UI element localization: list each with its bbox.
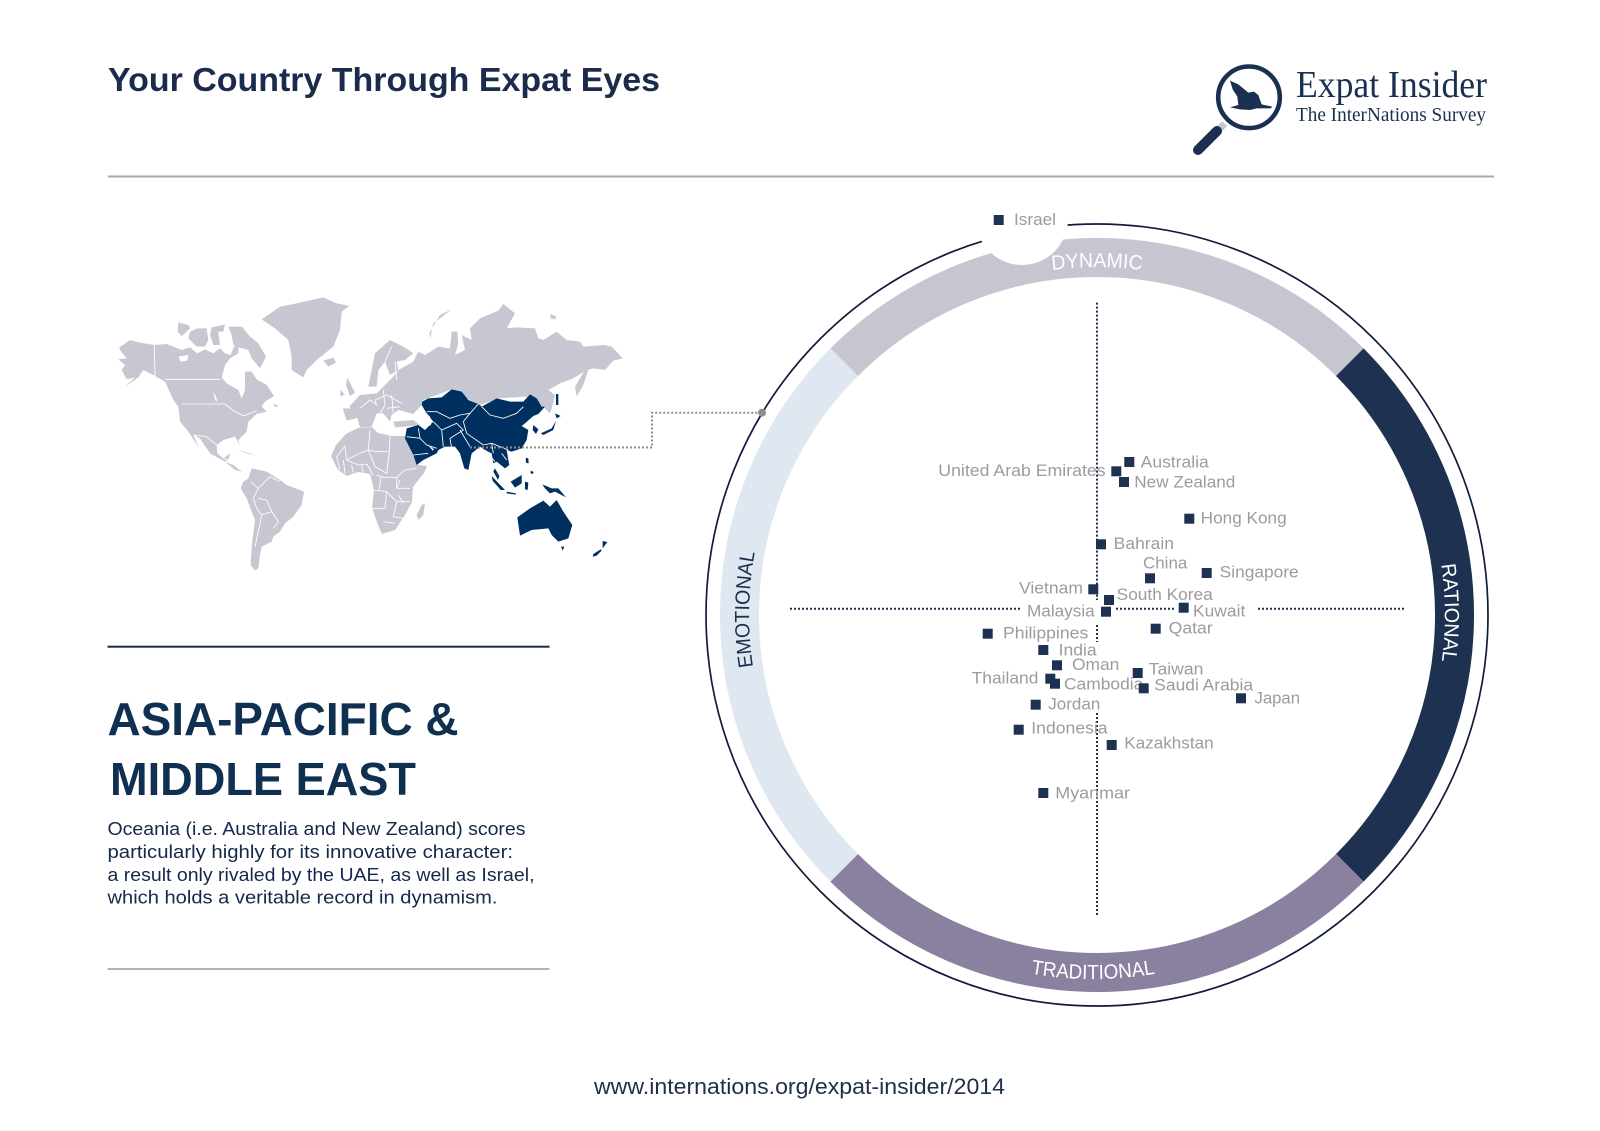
country: Singapore: Singapore	[1220, 563, 1299, 582]
icon: magnifying glass with bird	[1198, 66, 1280, 150]
text block: region description	[106, 818, 535, 908]
country: Qatar	[1151, 619, 1213, 638]
country: Philippines: Philippines	[1003, 623, 1088, 642]
ring segment: rational	[1350, 362, 1455, 868]
logo wordmark: Expat Insider	[1296, 64, 1487, 106]
map: Australasia	[492, 458, 607, 557]
label: DYNAMIC: DYNAMIC	[1052, 253, 1142, 270]
text block: region description: a result only rivaled by the UAE, as well as Israel,	[108, 864, 534, 885]
ring segment: traditional	[844, 868, 1350, 973]
country: Cambodia: Cambodia	[1064, 675, 1144, 694]
text block: region description: particularly highly for its innovative character:	[108, 841, 513, 862]
connector: dotted leader from map to chart	[470, 413, 758, 448]
panel: region divider bottom	[108, 968, 550, 970]
country: Kazakhstan: Kazakhstan	[1124, 734, 1214, 753]
country: Myanmar: Myanmar	[1055, 783, 1130, 802]
country: Kuwait: Kuwait	[1193, 601, 1246, 620]
country: Japan: Japan	[1254, 688, 1300, 707]
label: RATIONAL: RATIONAL	[1441, 564, 1460, 661]
country: United Arab Emirates: United Arab Emirates	[938, 461, 1106, 480]
text block: region description: which holds a veritable record in dynamism.	[106, 886, 498, 908]
footer url: www.internations.org/expat-insider/2014	[593, 1074, 1005, 1099]
country: Hong Kong: Hong Kong	[1201, 508, 1287, 527]
label: TRADITIONAL: TRADITIONAL	[1033, 960, 1155, 979]
map: South America and Africa	[241, 427, 427, 571]
country: Thailand: Thailand	[972, 668, 1038, 687]
map: highlighted Asia-Pacific and Middle East region	[405, 389, 561, 490]
title: Your Country Through Expat Eyes	[108, 61, 660, 98]
logo: Expat Insider	[1198, 64, 1487, 150]
country: Australia: Australia	[1141, 452, 1209, 471]
chart: circular personality plot	[705, 210, 1489, 1007]
country: Oman: Oman	[1072, 655, 1119, 674]
notch behind Israel	[976, 173, 1068, 265]
map: Europe and Russia	[340, 304, 623, 427]
leader end dot	[758, 409, 766, 417]
country: Qatar: Qatar	[1169, 619, 1213, 638]
ring segment: dynamic	[844, 257, 1350, 362]
country: New Zealand: New Zealand	[1134, 472, 1235, 491]
country: India	[1038, 640, 1097, 659]
country: Indonesia: Indonesia	[1031, 719, 1108, 738]
country: India: India	[1059, 640, 1097, 659]
heading: region name: MIDDLE EAST	[110, 753, 416, 805]
country: Taiwan: Taiwan	[1149, 660, 1203, 679]
country: Israel: Israel	[1014, 210, 1056, 229]
axes	[790, 303, 1405, 916]
country: Malaysia: Malaysia	[1027, 601, 1095, 620]
text block: region description: Oceania (i.e. Australia and New Zealand) scores	[108, 818, 526, 839]
country: Jordan: Jordan	[1048, 694, 1100, 713]
country: Bahrain: Bahrain	[1114, 534, 1174, 553]
header rule	[108, 176, 1494, 178]
panel: region divider top	[108, 646, 550, 648]
country: China: China	[1143, 554, 1188, 573]
country: Saudi Arabia: Saudi Arabia	[1154, 675, 1254, 694]
map: Americas north	[118, 297, 349, 472]
outer circle	[706, 224, 1488, 1006]
country: Oman	[1052, 655, 1119, 674]
label: EMOTIONAL: EMOTIONAL	[734, 552, 755, 668]
heading: region name	[108, 693, 458, 805]
world map	[118, 297, 758, 571]
heading: region name: ASIA-PACIFIC &	[108, 693, 458, 745]
country: Vietnam: Vietnam	[1019, 579, 1083, 598]
country: China	[1143, 554, 1188, 583]
country: South Korea: South Korea	[1117, 585, 1213, 604]
logo tagline: The InterNations Survey	[1296, 104, 1487, 126]
ring segment: emotional	[739, 362, 844, 868]
country: Israel	[994, 210, 1056, 229]
